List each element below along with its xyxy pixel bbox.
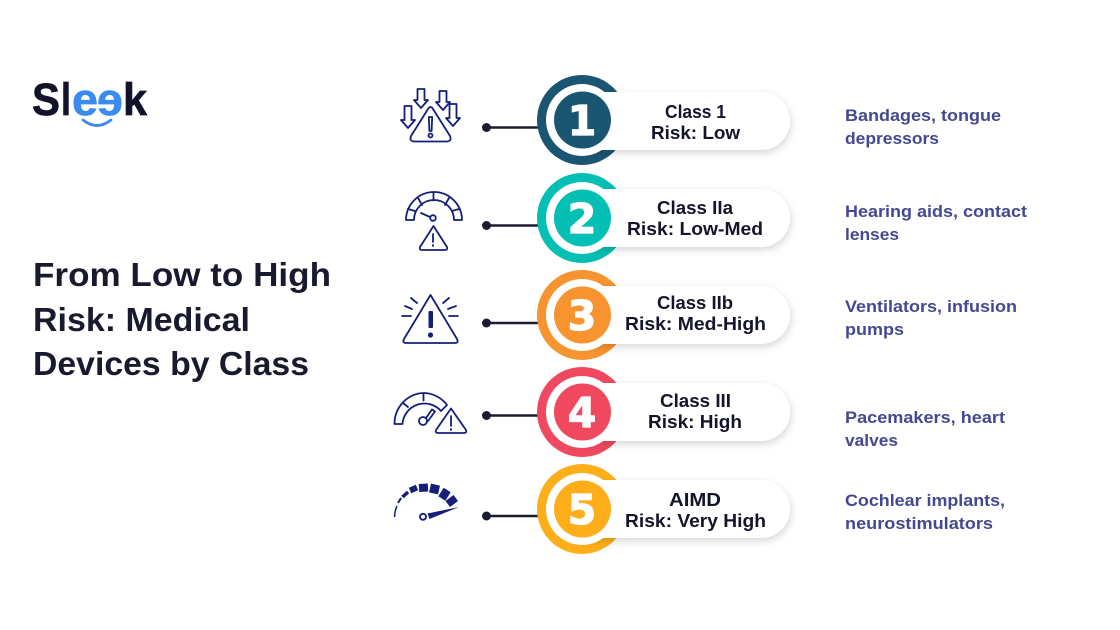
row 1: Class 1 [401,75,1001,165]
number badge [537,75,790,165]
risk label [651,102,741,143]
connector [482,411,540,420]
logo: Sleek: k [123,74,148,125]
examples [845,106,1001,148]
risk label: Risk: Low [651,123,741,143]
row 4: Class III [394,367,1005,457]
risk label: Class IIb [657,293,733,313]
number badge: 3 [568,292,596,340]
risk label: Class III [660,391,731,411]
risk label [648,391,742,432]
connector [482,123,540,132]
number badge [537,367,790,457]
number badge: 4 [568,389,596,437]
row 3: Class IIb [402,270,1017,360]
icon: gauge with warning [406,192,462,250]
risk label [625,490,766,531]
connector [482,318,540,328]
connector [482,512,540,520]
risk label: Risk: High [648,412,742,432]
examples: depressors [845,129,939,148]
title: Risk: Medical [33,301,250,338]
risk label [625,293,766,334]
examples: Ventilators, infusion [845,297,1017,316]
risk label: Risk: Very High [625,511,766,531]
number badge: 5 [568,486,596,534]
title [33,256,331,382]
logo: Sleek: S [32,74,60,125]
examples: Pacemakers, heart [845,408,1005,427]
examples [845,297,1017,339]
examples: pumps [845,320,904,339]
number badge [537,270,790,360]
icon: gauge with warning triangle [394,393,466,433]
examples: Hearing aids, contact [845,202,1027,221]
title: From Low to High [33,256,331,293]
risk label: Risk: Med-High [625,314,766,334]
icon: speedometer near maximum [394,488,459,520]
risk label: Class 1 [665,102,726,122]
examples: lenses [845,225,899,244]
logo: Sleek: e [97,74,123,125]
risk label: AIMD [669,490,721,510]
logo: Sleek: e [72,74,98,125]
connector [482,221,540,230]
logo: Sleek [32,74,148,126]
examples: neurostimulators [845,514,993,533]
examples [845,491,1005,533]
risk label: Risk: Low-Med [627,219,763,239]
examples: valves [845,431,898,450]
risk label [627,198,763,239]
examples [845,202,1027,244]
row 5: AIMD [394,464,1005,554]
examples: Bandages, tongue [845,106,1001,125]
icon: warning triangle with rays [402,295,458,343]
number badge [537,173,790,263]
title: Devices by Class [33,345,309,382]
risk label: Class IIa [657,198,734,218]
examples: Cochlear implants, [845,491,1005,510]
examples [845,408,1005,450]
number badge: 1 [568,97,596,145]
number badge: 2 [568,195,596,243]
icon: warning triangle with down arrows [401,89,460,142]
logo: Sleek: l [61,74,71,125]
row 2: Class IIa [406,173,1027,263]
number badge [537,464,790,554]
